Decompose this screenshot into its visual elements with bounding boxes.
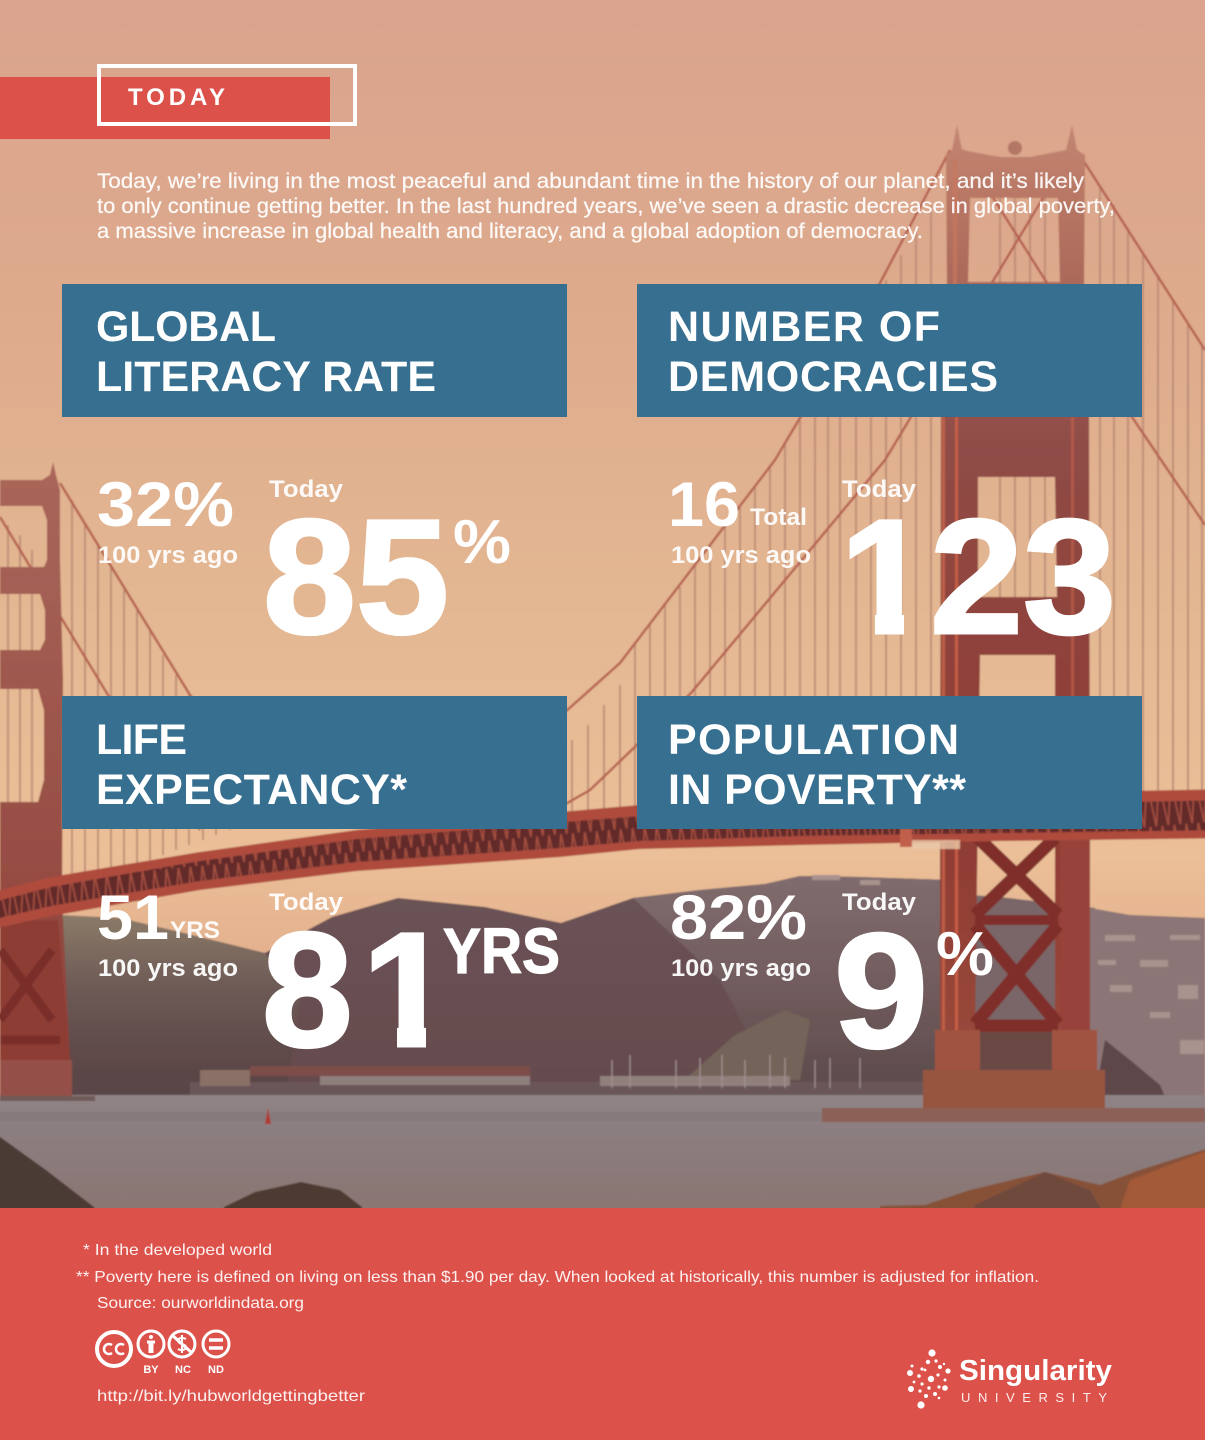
- panel: life expectancy: [62, 696, 567, 1081]
- stat: 9% today: %: [936, 920, 994, 989]
- shoreline town: [190, 1055, 950, 1095]
- bridge deck: [0, 789, 1205, 934]
- stat: 85% today: %: [453, 508, 511, 577]
- logo: Singularity University: [907, 1349, 1112, 1409]
- heading: number of democracies: NUMBER OF: [668, 303, 940, 351]
- suspender cables: [8, 165, 1202, 900]
- stat: 16 total 100 years ago: 16: [668, 470, 740, 540]
- footnotes: [76, 1242, 1039, 1312]
- stat: 9% today: Today: [842, 889, 916, 916]
- heading: number of democracies: [637, 284, 1142, 417]
- buoy: [265, 1108, 271, 1124]
- stat: 81 yrs today: 1: [362, 898, 453, 1081]
- panel: number of democracies: [637, 284, 1142, 668]
- section tag: TODAY: TODAY: [128, 84, 225, 111]
- footnotes: * In the developed world: [83, 1242, 272, 1259]
- heading: global literacy rate: LITERACY RATE: [96, 353, 436, 401]
- stat: 82% 100 years ago: [670, 883, 811, 982]
- stat: 81 yrs today: 8: [262, 898, 353, 1081]
- tower pedestals and base: [980, 1032, 1052, 1070]
- heading: global literacy rate: GLOBAL: [96, 303, 276, 351]
- icon: creative commons license: NC: [175, 1364, 191, 1376]
- heading: population in poverty: [637, 696, 1142, 829]
- section tag: TODAY: [0, 66, 355, 139]
- stat: 16 total 100 years ago: [668, 470, 811, 569]
- stat: 51 yrs 100 years ago: YRS: [170, 917, 220, 944]
- stat: 123 today: [842, 480, 1112, 636]
- left tower: [0, 462, 95, 1101]
- intro text block: a massive increase in global health and literacy, and a global adoption of democracy.: [97, 220, 923, 243]
- stat: 32% 100 years ago: 100 yrs ago: [98, 542, 238, 569]
- stat: 81 yrs today: YRS: [443, 915, 560, 987]
- stat: 85% today: 85: [263, 485, 449, 668]
- logo: Singularity University: Singularity: [959, 1355, 1112, 1387]
- stat: 16 total 100 years ago: Total: [750, 504, 807, 531]
- intro text block: [97, 170, 1115, 243]
- intro text block: Today, we’re living in the most peaceful and abundant time in the history of our planet, and it’s likely: [97, 170, 1085, 193]
- footnotes: Source: ourworldindata.org: [97, 1295, 304, 1312]
- stat: 123 today: 1: [840, 485, 931, 668]
- heading: population in poverty: IN POVERTY**: [668, 766, 966, 814]
- stat: 81 yrs today: Today: [269, 889, 343, 916]
- heading: life expectancy: [62, 696, 567, 829]
- stat: 85% today: Today: [269, 476, 343, 503]
- icon: creative commons license: [97, 1331, 229, 1376]
- stat: 82% 100 years ago: 100 yrs ago: [671, 955, 811, 982]
- footnotes: ** Poverty here is defined on living on less than $1.90 per day. When looked at historically, this number is adjusted for inflation.: [76, 1269, 1039, 1286]
- stat: 9% today: [834, 889, 994, 1082]
- heading: number of democracies: DEMOCRACIES: [668, 353, 998, 401]
- stat: 82% 100 years ago: 82%: [670, 883, 807, 953]
- heading: life expectancy: EXPECTANCY*: [96, 766, 407, 814]
- icon: creative commons license: ND: [208, 1364, 224, 1376]
- stat: 51 yrs 100 years ago: 51: [97, 883, 169, 953]
- stat: 32% 100 years ago: 32%: [97, 470, 234, 540]
- hills on the far shore: [60, 875, 1205, 1098]
- heading: population in poverty: POPULATION: [668, 716, 959, 764]
- stat: 85% today: [263, 476, 511, 668]
- stat: 16 total 100 years ago: 100 yrs ago: [671, 542, 811, 569]
- stat: 9% today: 9: [834, 899, 928, 1082]
- stat: 32% 100 years ago: [97, 470, 238, 569]
- footer band: [0, 1208, 1205, 1440]
- stat: 123 today: Today: [842, 476, 916, 503]
- water: [0, 1095, 1205, 1215]
- tower x-bracing: [975, 838, 1058, 1026]
- icon: creative commons license: BY: [143, 1364, 159, 1376]
- intro text block: to only continue getting better. In the last hundred years, we’ve seen a drastic decrease in global poverty,: [97, 195, 1115, 218]
- foreground rocks: [0, 1136, 1205, 1208]
- heading: global literacy rate: [62, 284, 567, 417]
- heading: life expectancy: LIFE: [96, 716, 187, 764]
- logo: Singularity University: UNIVERSITY: [961, 1390, 1107, 1405]
- url: http://bit.ly/hubworldgettingbetter: [97, 1388, 366, 1405]
- stat: 51 yrs 100 years ago: [97, 883, 238, 982]
- right tower: [822, 125, 1205, 1122]
- stat: 81 yrs today: [266, 892, 558, 1050]
- panel: population in poverty: [637, 696, 1142, 1082]
- stat: 123 today: 23: [930, 485, 1116, 668]
- main cables: [0, 150, 1205, 830]
- panel: global literacy rate: [62, 284, 567, 668]
- stat: 51 yrs 100 years ago: 100 yrs ago: [98, 955, 238, 982]
